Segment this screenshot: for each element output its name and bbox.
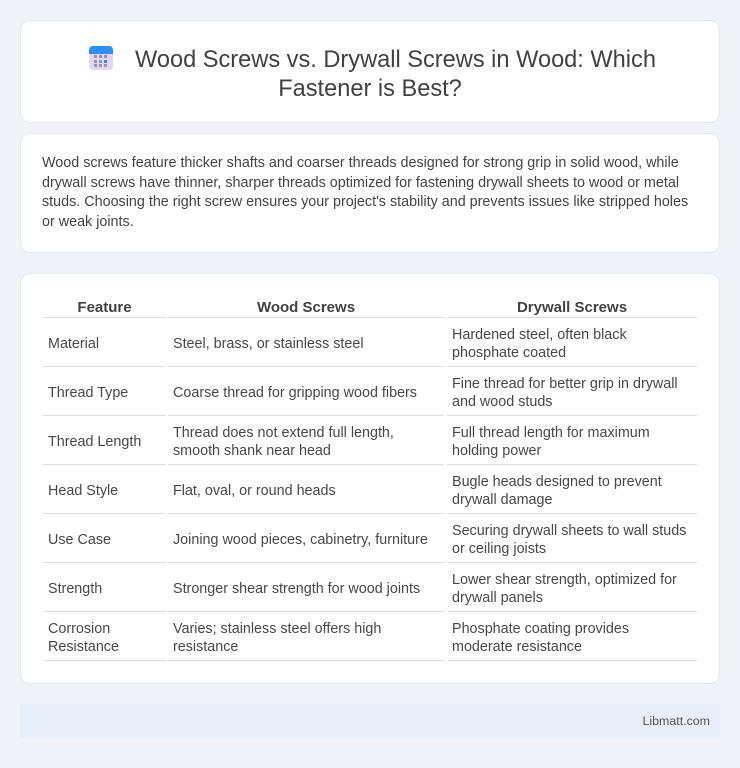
- panel: title card: [20, 20, 720, 123]
- header: Wood Screws: Wood Screws: [257, 299, 355, 316]
- title: ​Wood Screws vs. Drywall Screws in Wood: Which: [135, 47, 656, 73]
- cell: [452, 572, 677, 606]
- row: Thread Type: Thread Type: [48, 385, 128, 401]
- cell: Joining wood pieces, cabinetry, furniture: [173, 532, 428, 548]
- row: Material: Material: [48, 336, 99, 352]
- cell: phosphate coated: [452, 345, 566, 361]
- row: Use Case: Use Case: [48, 532, 111, 548]
- row: Corrosion Resistance: Resistance: [48, 639, 119, 655]
- cell: Securing drywall sheets to wall studs: [452, 523, 686, 539]
- row: Strength: Strength: [48, 581, 102, 597]
- row: Corrosion Resistance: Corrosion: [48, 621, 110, 637]
- cell: Hardened steel, often black: [452, 327, 627, 343]
- cell: Steel, brass, or stainless steel: [173, 336, 364, 352]
- cell: smooth shank near head: [173, 443, 331, 459]
- icon: calendar: [89, 46, 113, 70]
- title: [135, 47, 656, 102]
- cell: [173, 425, 394, 459]
- footer bar: [20, 704, 720, 738]
- comparison table: [43, 299, 697, 661]
- cell: or ceiling joists: [452, 541, 546, 557]
- cell: [452, 376, 678, 410]
- cell: holding power: [452, 443, 541, 459]
- cell: drywall panels: [452, 590, 543, 606]
- footer text: Libmatt.com: [643, 714, 710, 728]
- cell: moderate resistance: [452, 639, 582, 655]
- cell: [452, 523, 686, 557]
- cell: resistance: [173, 639, 238, 655]
- cell: Bugle heads designed to prevent: [452, 474, 662, 490]
- header: Feature: Feature: [77, 299, 132, 316]
- panel: comparison table card: [20, 273, 720, 684]
- intro text: [42, 155, 688, 230]
- cell: Coarse thread for gripping wood fibers: [173, 385, 417, 401]
- panel: intro card: [20, 133, 720, 253]
- intro text: or weak joints.: [42, 214, 134, 230]
- intro text: studs. Choosing the right screw ensures your project's stability and prevents issues like stripped holes: [42, 194, 688, 210]
- title: Fastener is Best?: [278, 76, 462, 102]
- cell: [452, 474, 662, 508]
- cell: Stronger shear strength for wood joints: [173, 581, 420, 597]
- cell: drywall damage: [452, 492, 552, 508]
- cell: [452, 621, 629, 655]
- row: Thread Length: Thread Length: [48, 434, 141, 450]
- cell: Thread does not extend full length,: [173, 425, 394, 441]
- cell: Phosphate coating provides: [452, 621, 629, 637]
- cell: Full thread length for maximum: [452, 425, 650, 441]
- cell: and wood studs: [452, 394, 552, 410]
- row: Corrosion Resistance: [48, 621, 119, 655]
- cell: Fine thread for better grip in drywall: [452, 376, 678, 392]
- cell: Lower shear strength, optimized for: [452, 572, 677, 588]
- cell: Flat, oval, or round heads: [173, 483, 336, 499]
- cell: Varies; stainless steel offers high: [173, 621, 381, 637]
- cell: [173, 621, 381, 655]
- header: Drywall Screws: Drywall Screws: [517, 299, 627, 316]
- intro text: drywall screws have thinner, sharper threads optimized for fastening drywall sheets to wood or metal: [42, 174, 679, 190]
- cell: [452, 425, 650, 459]
- cell: [452, 327, 627, 361]
- intro text: Wood screws feature thicker shafts and coarser threads designed for strong grip in solid wood, while: [42, 155, 679, 171]
- row: Head Style: Head Style: [48, 483, 118, 499]
